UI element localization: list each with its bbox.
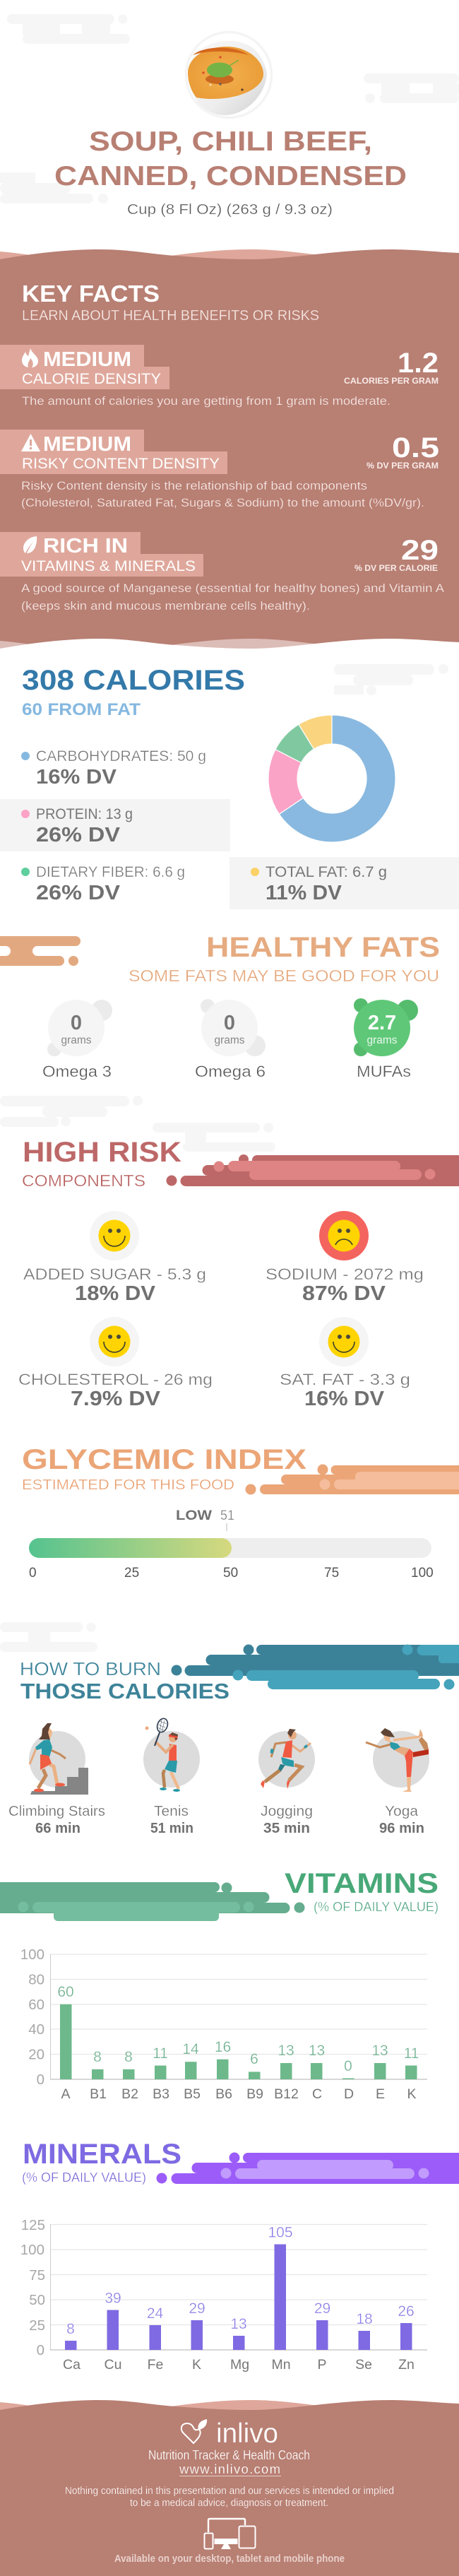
- decoration: high risk banner: [167, 1154, 459, 1186]
- bar chart: vitamins: 60: [57, 1984, 74, 2000]
- bar chart: minerals: 18: [356, 2311, 373, 2327]
- legend: total fat: [251, 864, 387, 904]
- subheading: key facts: LEARN ABOUT HEALTH BENEFITS OR RISKS: [22, 307, 319, 324]
- bar chart: minerals: Ca: [63, 2357, 81, 2373]
- icon: woman climbing stairs: [29, 1723, 88, 1795]
- bar chart: vitamins: C: [312, 2086, 322, 2102]
- bar chart: vitamins: 8: [93, 2049, 102, 2065]
- bar chart: minerals: 75: [29, 2267, 45, 2283]
- heading: key facts: KEY FACTS: [22, 280, 160, 307]
- legend: dietary fiber: DIETARY FIBER: 6.6 g: [36, 864, 185, 880]
- bar chart: minerals: Zn: [398, 2357, 415, 2373]
- website link: www.inlivo.com: [179, 2462, 280, 2476]
- bar chart: minerals: 29: [189, 2300, 205, 2317]
- gauge scale: 25: [124, 1566, 139, 1581]
- bar chart: vitamins: 60: [28, 1997, 44, 2013]
- icon: tennis player: [143, 1717, 200, 1792]
- bar chart: minerals: 13: [230, 2316, 247, 2332]
- bar chart: vitamins: 20: [28, 2046, 44, 2063]
- icon: warning triangle: [21, 434, 40, 451]
- fact: rich in vitamins and minerals: % DV PER CALORIE: [354, 563, 438, 573]
- component: cholesterol: [18, 1317, 213, 1410]
- disclaimer: to be a medical advice, diagnosis or treatment.: [130, 2497, 328, 2509]
- panel: minerals: [20, 2139, 459, 2373]
- icon: leaf: [23, 536, 37, 553]
- decoration: vitamins banner: [0, 1882, 305, 1921]
- activity: tennis: 51 min: [150, 1820, 193, 1836]
- bar chart: minerals: 25: [29, 2317, 45, 2334]
- subheading: percent of daily value: (% OF DAILY VALUE): [22, 2170, 146, 2185]
- component: saturated fat: SAT. FAT - 3.3 g: [280, 1371, 410, 1388]
- bar chart: vitamins: 8: [124, 2049, 133, 2065]
- panel: key facts: [0, 249, 459, 657]
- component: saturated fat: [280, 1317, 410, 1410]
- fact: risky content density: % DV PER GRAM: [366, 461, 439, 471]
- component: cholesterol: 7.9% DV: [71, 1388, 161, 1410]
- bar chart: vitamins: B9: [246, 2086, 263, 2102]
- bar chart: minerals: 39: [105, 2291, 121, 2306]
- activity: yoga: 96 min: [379, 1820, 424, 1836]
- heading: vitamins: VITAMINS: [285, 1868, 439, 1899]
- bar chart: minerals: 29: [314, 2300, 330, 2317]
- icon: yoga pose: [366, 1728, 429, 1792]
- bar chart: minerals: Mg: [230, 2357, 249, 2373]
- panel: high risk components: [18, 1137, 459, 1410]
- bar chart: minerals: Cu: [105, 2357, 121, 2373]
- disclaimer: [65, 2485, 394, 2509]
- bar chart: vitamins: B2: [121, 2086, 138, 2102]
- heading: high risk: HIGH RISK: [23, 1137, 181, 1168]
- gauge scale: [29, 1566, 434, 1581]
- legend: carbohydrates: CARBOHYDRATES: 50 g: [36, 748, 206, 764]
- gauge label: [176, 1508, 234, 1531]
- decoration: minerals banner: [157, 2152, 459, 2184]
- fact: rich in vitamins and minerals: 29: [401, 535, 439, 566]
- component: added sugar: [23, 1211, 206, 1305]
- stat: omega 6: 0: [224, 1012, 235, 1034]
- gauge scale: 75: [324, 1566, 339, 1581]
- gauge label: 51: [220, 1508, 234, 1523]
- bar chart: vitamins: B5: [184, 2086, 201, 2102]
- activity: yoga: Yoga: [385, 1804, 419, 1819]
- activity: climbing stairs: 66 min: [35, 1820, 81, 1836]
- stat: mufas: grams: [366, 1034, 398, 1046]
- bar chart: minerals: 26: [398, 2303, 415, 2320]
- bar chart: minerals: 24: [147, 2305, 163, 2322]
- icon: smiley: [319, 1317, 369, 1366]
- bar chart: vitamins: 13: [309, 2043, 325, 2059]
- title: SOUP, CHILI BEEF,: [89, 126, 372, 157]
- bar chart: vitamins: 0: [344, 2058, 352, 2074]
- component: added sugar: 18% DV: [75, 1282, 156, 1305]
- bar chart: vitamins: B12: [274, 2086, 299, 2102]
- fact: risky content density: (Cholesterol, Saturated Fat, Sugars & Sodium) to the amount (%DV/gr).: [21, 496, 424, 509]
- bar chart: vitamins: 0: [37, 2072, 44, 2088]
- icon: jogger: [258, 1729, 315, 1789]
- background cloud: burn: [0, 1622, 97, 1652]
- title: CANNED, CONDENSED: [54, 161, 407, 191]
- gauge scale: 100: [411, 1566, 434, 1581]
- activity: climbing stairs: Climbing Stairs: [8, 1804, 105, 1819]
- fact: rich in vitamins and minerals: A good source of Manganese (essential for healthy bones) and Vitamin A: [21, 581, 445, 595]
- fact: risky content density: Risky Content density is the relationship of bad components: [21, 479, 367, 492]
- fact: rich in vitamins and minerals: VITAMINS & MINERALS: [21, 557, 196, 574]
- subheading: some fats: SOME FATS MAY BE GOOD FOR YOU: [129, 967, 439, 985]
- bar chart: vitamins: 14: [182, 2041, 199, 2057]
- stat: omega 3: Omega 3: [42, 1063, 112, 1080]
- component: sodium: SODIUM - 2072 mg: [266, 1265, 424, 1283]
- stat: omega 3: 0: [71, 1012, 82, 1034]
- fact: risky content density: MEDIUM: [43, 433, 131, 456]
- icon: soup bowl: [186, 33, 271, 117]
- background cloud: calories: [334, 664, 448, 695]
- legend: total fat: 11% DV: [266, 882, 342, 904]
- fact: calorie density: The amount of calories you are getting from 1 gram is moderate.: [22, 394, 391, 408]
- background clouds: header: [0, 14, 459, 203]
- fact: rich in vitamins and minerals: (keeps skin and mucous membrane cells healthy).: [21, 599, 310, 613]
- heading: those calories: THOSE CALORIES: [20, 1679, 230, 1703]
- bar chart: vitamins: 6: [250, 2051, 258, 2067]
- bar chart: minerals: 105: [268, 2224, 293, 2241]
- decoration: healthy fats banner: [0, 936, 81, 966]
- subheading: components: COMPONENTS: [22, 1171, 145, 1190]
- bar chart: vitamins: 16: [215, 2039, 231, 2055]
- icon: smiley: [90, 1317, 139, 1366]
- heading: how to burn: HOW TO BURN: [20, 1658, 161, 1679]
- subheading: estimated: ESTIMATED FOR THIS FOOD: [22, 1477, 234, 1493]
- subtitle: serving size: Cup (8 Fl Oz) (263 g / 9.3 oz): [127, 202, 333, 218]
- bar chart: vitamins: 100: [20, 1946, 44, 1963]
- availability note: Available on your desktop, tablet and mobile phone: [114, 2553, 345, 2565]
- activity: climbing stairs: [8, 1723, 105, 1836]
- component: added sugar: ADDED SUGAR - 5.3 g: [23, 1265, 206, 1283]
- icon: flame: [22, 348, 38, 367]
- legend: dietary fiber: 26% DV: [36, 882, 121, 904]
- chart: macronutrient donut: [268, 715, 395, 842]
- bar chart: vitamins: B6: [215, 2086, 232, 2102]
- fact: calorie density: [0, 345, 439, 408]
- bar chart: vitamins: 40: [28, 2021, 44, 2038]
- stat: omega 6: Omega 6: [195, 1063, 266, 1080]
- bar chart: vitamins: B3: [153, 2086, 169, 2102]
- subheading: 60 from fat: 60 FROM FAT: [22, 700, 141, 719]
- bar chart: minerals: 50: [29, 2292, 45, 2308]
- bar chart: minerals: 8: [66, 2321, 75, 2337]
- fact: rich in vitamins and minerals: [0, 532, 445, 613]
- bar chart: minerals: 0: [37, 2342, 44, 2358]
- bar chart: minerals: [20, 2217, 427, 2373]
- gauge scale: 0: [29, 1566, 37, 1581]
- bar chart: vitamins: 11: [404, 2045, 419, 2062]
- bar chart: minerals: 100: [20, 2242, 44, 2258]
- stat: omega 6: grams: [214, 1034, 245, 1046]
- panel: how to burn those calories: [8, 1645, 459, 1836]
- gauge scale: 50: [223, 1566, 238, 1581]
- icon: desktop, tablet and phone: [205, 2519, 256, 2549]
- bar chart: minerals: Se: [355, 2357, 372, 2373]
- bar chart: minerals: K: [192, 2357, 201, 2373]
- stat: omega 3: [42, 1000, 112, 1080]
- fact: calorie density: 1.2: [398, 348, 439, 379]
- tagline: Nutrition Tracker & Health Coach: [148, 2448, 310, 2462]
- logo: inlivo heart and wordmark: [181, 2418, 278, 2449]
- heading: 308 calories: 308 CALORIES: [22, 665, 245, 696]
- bar chart: minerals: P: [317, 2357, 327, 2373]
- panel: footer: [0, 2400, 459, 2576]
- fact: risky content density: RISKY CONTENT DENSITY: [22, 455, 220, 472]
- decoration: burn banner: [171, 1645, 459, 1690]
- activity: yoga: [366, 1728, 429, 1836]
- component: sodium: [266, 1211, 424, 1305]
- heading: healthy fats: HEALTHY FATS: [206, 932, 440, 963]
- stat: mufas: MUFAs: [357, 1063, 411, 1080]
- bar chart: vitamins: 13: [371, 2043, 388, 2059]
- bar chart: vitamins: D: [344, 2086, 354, 2102]
- bar chart: vitamins: 80: [28, 1971, 44, 1988]
- component: saturated fat: 16% DV: [304, 1388, 385, 1410]
- disclaimer: Nothing contained in this presentation and our services is intended or implied: [65, 2485, 394, 2497]
- panel: calories: [0, 665, 459, 909]
- fact: calorie density: MEDIUM: [43, 348, 131, 371]
- bar chart: vitamins: A: [61, 2086, 71, 2102]
- bar chart: minerals: Fe: [148, 2357, 163, 2373]
- logo: inlivo heart and wordmark: inlivo: [216, 2418, 278, 2449]
- activity: jogging: 35 min: [263, 1820, 310, 1836]
- activity: tennis: [143, 1717, 200, 1836]
- activity: jogging: Jogging: [261, 1804, 313, 1819]
- fact: risky content density: [0, 430, 439, 509]
- gauge bar: [29, 1538, 431, 1558]
- bar chart: vitamins: K: [407, 2086, 417, 2102]
- heading: glycemic index: GLYCEMIC INDEX: [22, 1444, 306, 1475]
- background clouds: high risk: [0, 1096, 275, 1152]
- bar chart: vitamins: 11: [153, 2045, 168, 2062]
- bar chart: vitamins: 13: [278, 2043, 294, 2059]
- decoration: glycemic banner: [246, 1464, 459, 1495]
- bar chart: vitamins: [20, 1946, 427, 2102]
- legend: carbohydrates: 16% DV: [36, 766, 117, 788]
- component: sodium: 87% DV: [302, 1282, 386, 1305]
- activity: jogging: [258, 1729, 315, 1836]
- stat: mufas: [354, 998, 418, 1080]
- legend: protein: 26% DV: [36, 824, 121, 846]
- component: cholesterol: CHOLESTEROL - 26 mg: [18, 1371, 213, 1388]
- stat: omega 6: [195, 999, 266, 1080]
- icon: smiley: [90, 1211, 139, 1260]
- legend: total fat: TOTAL FAT: 6.7 g: [266, 864, 387, 880]
- bar chart: minerals: Mn: [271, 2357, 291, 2373]
- bar chart: vitamins: B1: [90, 2086, 107, 2102]
- heading: minerals: MINERALS: [23, 2139, 181, 2170]
- legend: carbohydrates: [21, 748, 206, 788]
- panel: healthy fats: [0, 932, 440, 1080]
- legend: protein: [21, 806, 133, 846]
- stat: omega 3: grams: [61, 1034, 92, 1046]
- panel: vitamins: [0, 1868, 439, 2102]
- legend: dietary fiber: [21, 864, 185, 904]
- gauge label: LOW: [176, 1508, 213, 1523]
- fact: risky content density: 0.5: [392, 432, 439, 463]
- legend: protein: PROTEIN: 13 g: [36, 806, 133, 822]
- subheading: percent of daily value: (% OF DAILY VALUE): [314, 1899, 439, 1914]
- icon: sad face: [319, 1211, 369, 1260]
- bar chart: vitamins: E: [376, 2086, 385, 2102]
- activity: tennis: Tenis: [154, 1804, 189, 1819]
- fact: calorie density: CALORIE DENSITY: [22, 370, 161, 387]
- title: [54, 126, 407, 191]
- bar chart: minerals: 125: [21, 2217, 45, 2233]
- panel: glycemic index: [22, 1444, 459, 1581]
- fact: rich in vitamins and minerals: RICH IN: [43, 535, 128, 557]
- fact: calorie density: CALORIES PER GRAM: [344, 376, 439, 386]
- stat: mufas: 2.7: [368, 1012, 396, 1034]
